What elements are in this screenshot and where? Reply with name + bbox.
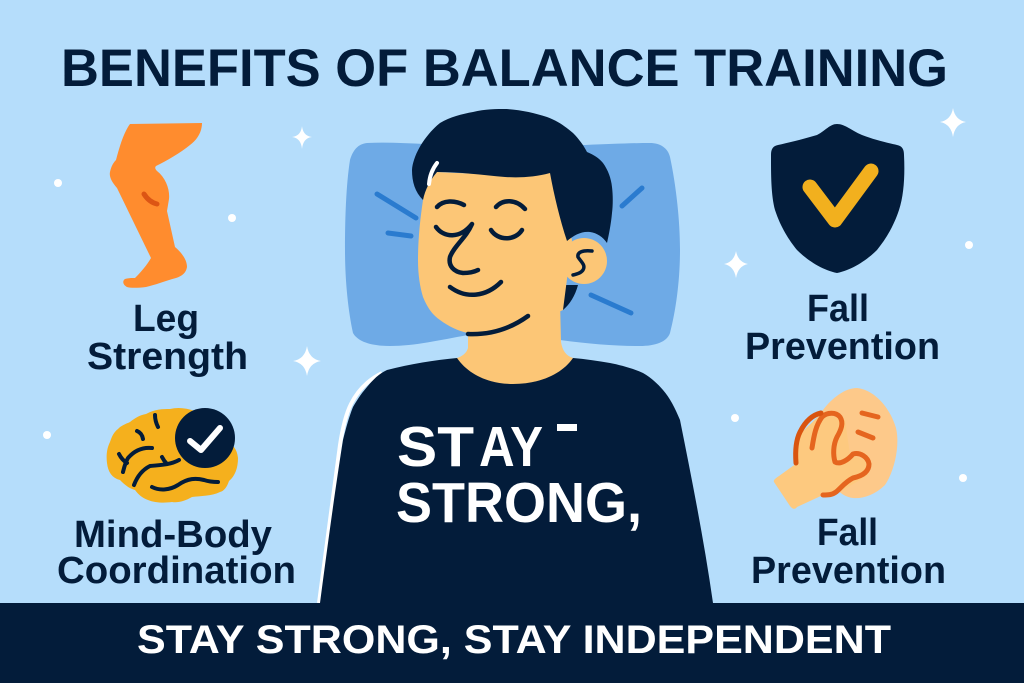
label: leg strength: Strength <box>87 336 248 378</box>
shirt <box>319 358 713 603</box>
hair highlight <box>429 163 437 184</box>
sparkles and dots <box>43 108 973 482</box>
panel: leg strength <box>87 123 248 378</box>
icon: brain with check <box>107 408 238 503</box>
label: fall prevention <box>745 288 940 368</box>
pillow <box>345 143 680 346</box>
pillow motion lines <box>377 188 642 313</box>
panel: fall prevention shield <box>745 124 940 368</box>
hair back <box>560 285 578 310</box>
label: mind-body coordination <box>57 514 296 592</box>
facial features <box>436 201 592 334</box>
footer banner: STAY STRONG, STAY INDEPENDENT <box>137 618 891 662</box>
hair <box>412 109 613 243</box>
face <box>418 170 572 333</box>
panel: fall prevention hand <box>751 388 946 592</box>
panel: central figure <box>319 109 713 603</box>
label: fall prevention: Prevention <box>745 326 940 368</box>
icon: hand on face <box>774 388 897 509</box>
label: mind-body coordination: Coordination <box>57 550 296 592</box>
neck <box>457 300 573 384</box>
icon: leg <box>110 123 202 288</box>
label: fall prevention: Fall <box>817 512 878 554</box>
icon: shield <box>771 124 904 273</box>
label: fall prevention: Fall <box>807 288 869 330</box>
shirt text: STRONG, <box>396 471 642 535</box>
label: leg strength: Leg <box>133 298 199 340</box>
label: mind-body coordination: Mind-Body <box>74 514 272 556</box>
footer banner <box>0 603 1024 683</box>
label: leg strength <box>87 298 248 378</box>
shirt text: AY <box>479 415 543 479</box>
ear <box>561 238 607 284</box>
label: fall prevention <box>751 512 946 592</box>
shirt text: ST <box>397 415 474 479</box>
shirt text <box>396 415 642 535</box>
panel: mind-body coordination <box>57 408 296 592</box>
title: BENEFITS OF BALANCE TRAINING <box>61 39 948 98</box>
label: fall prevention: Prevention <box>751 550 946 592</box>
